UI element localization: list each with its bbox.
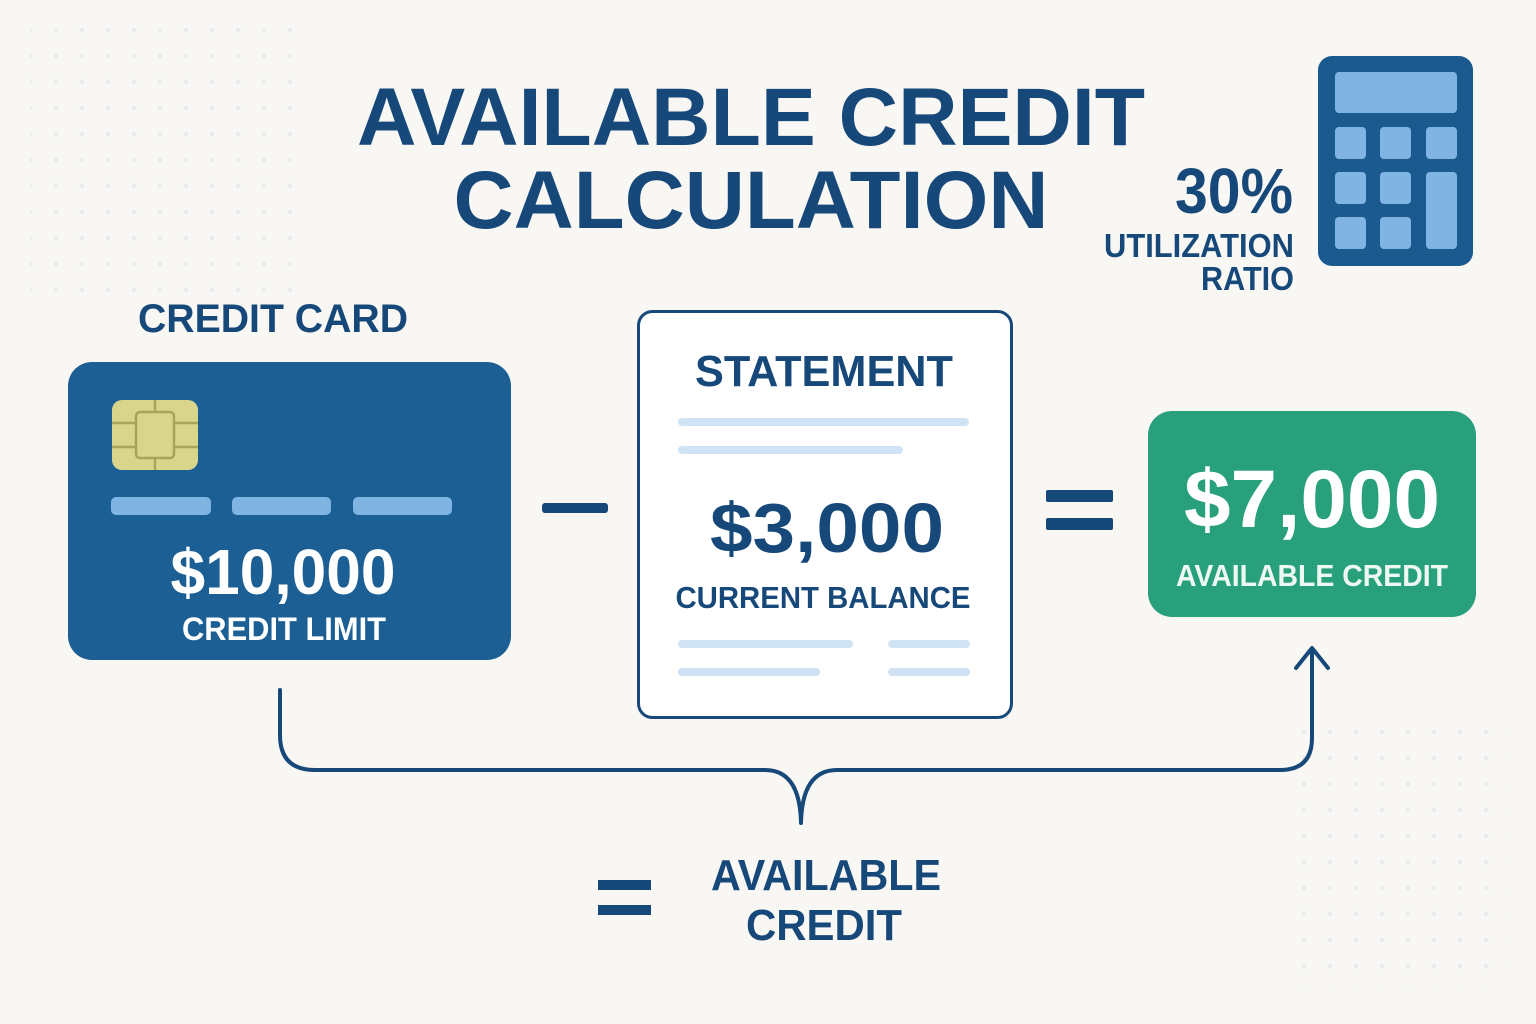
- panel: credit card: [68, 362, 511, 660]
- utilization ratio callout: RATIO: [1201, 260, 1294, 297]
- panel: available credit result: AVAILABLE CREDIT: [1176, 558, 1448, 593]
- equals sign: [1046, 490, 1113, 530]
- panel: statement: CURRENT BALANCE: [676, 580, 970, 615]
- icon: chip: [112, 400, 198, 470]
- minus sign: [542, 503, 608, 513]
- title: CALCULATION: [454, 155, 1048, 246]
- panel: available credit result: [1148, 411, 1476, 617]
- panel: statement: STATEMENT: [695, 347, 953, 396]
- title: AVAILABLE CREDIT: [357, 72, 1145, 163]
- panel: credit card: $10,000: [170, 536, 396, 608]
- icon: calculator: [1318, 56, 1473, 266]
- utilization ratio callout: 30%: [1175, 155, 1293, 227]
- panel: statement: [638, 312, 1012, 718]
- bottom label: available credit: AVAILABLE: [711, 851, 941, 900]
- heading: credit card: CREDIT CARD: [138, 297, 408, 341]
- arrow: bracket to result: [280, 648, 1328, 823]
- bottom label: available credit: CREDIT: [746, 901, 902, 950]
- utilization ratio callout: UTILIZATION: [1104, 227, 1294, 264]
- panel: credit card: CREDIT LIMIT: [182, 611, 386, 647]
- panel: available credit result: $7,000: [1184, 454, 1440, 545]
- bottom label: available credit: [711, 851, 941, 950]
- panel: statement: $3,000: [710, 489, 944, 567]
- bottom equals sign: [598, 880, 651, 915]
- title: [357, 72, 1145, 246]
- utilization ratio callout: [1104, 155, 1294, 297]
